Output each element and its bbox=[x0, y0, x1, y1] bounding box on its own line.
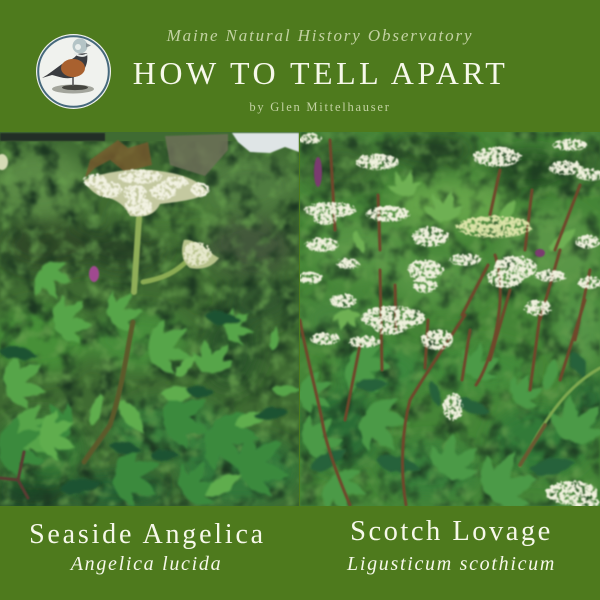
icon: harlequin duck logo bbox=[36, 34, 111, 109]
leaves: foreground foliage bbox=[289, 168, 600, 527]
plant stems bbox=[300, 140, 600, 505]
texture: light foliage mottling bbox=[0, 141, 299, 506]
panel: Seaside Angelica photo bbox=[0, 132, 301, 519]
flower: yellow-green umbel bbox=[456, 216, 532, 238]
background: sky, treeline and red shrubs bbox=[0, 133, 299, 178]
plant stem bbox=[0, 218, 186, 498]
title: HOW TO TELL APART bbox=[133, 55, 508, 91]
panel: right caption bbox=[346, 516, 556, 575]
flower: pink blossoms bbox=[89, 266, 99, 282]
panel: photo comparison bbox=[0, 132, 600, 506]
flower: side bud umbel bbox=[182, 240, 219, 269]
flowers: purple blossoms bbox=[314, 157, 545, 257]
flower: main umbel bbox=[83, 170, 209, 217]
panel: left caption bbox=[29, 519, 266, 575]
leaves: lower foliage bbox=[0, 248, 301, 519]
heading: Seaside Angelica: Seaside Angelica bbox=[29, 519, 266, 550]
flower: small white cluster bbox=[0, 154, 8, 170]
heading: Scotch Lovage: Scotch Lovage bbox=[350, 516, 553, 547]
texture: dark foliage mottling bbox=[0, 141, 299, 506]
text: Ligusticum scothicum: Ligusticum scothicum bbox=[347, 553, 556, 575]
texture: light foliage mottling bbox=[300, 132, 600, 506]
text: organisation name: Maine Natural History Observatory bbox=[167, 26, 473, 45]
panel: header band bbox=[0, 0, 600, 132]
panel: Scotch Lovage photo bbox=[289, 132, 600, 527]
texture: dark foliage mottling bbox=[300, 132, 600, 506]
text: author byline: by Glen Mittelhauser bbox=[249, 100, 391, 114]
flowers: white umbels bbox=[298, 134, 600, 509]
text: Angelica lucida: Angelica lucida bbox=[71, 553, 222, 575]
